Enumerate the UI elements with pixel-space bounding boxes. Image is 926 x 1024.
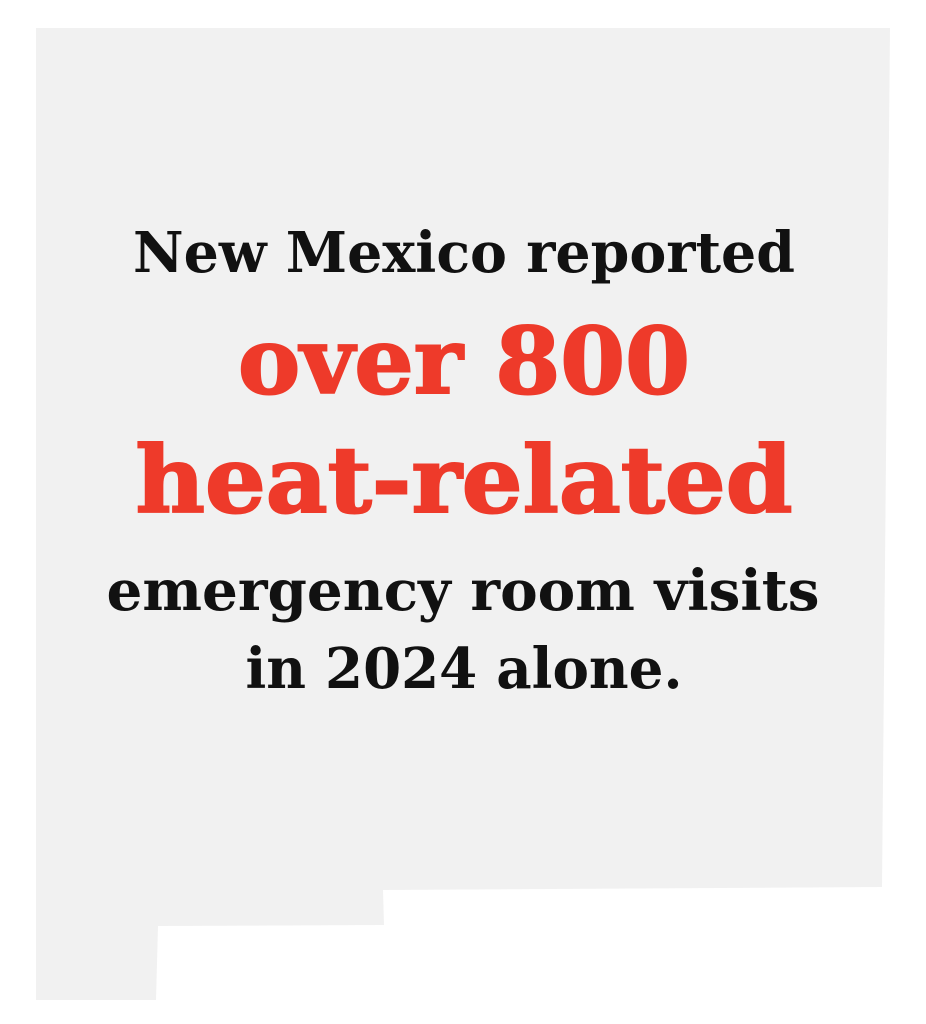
highlight: heat-related: heat-related xyxy=(136,426,792,534)
text line: emergency room visits: emergency room visits xyxy=(106,558,820,624)
text block: headline statistic xyxy=(106,220,820,702)
text line: in 2024 alone: in 2024 alone. xyxy=(246,636,682,702)
highlight: over 800: over 800 xyxy=(238,307,690,415)
heading line 1: New Mexico reported xyxy=(133,220,795,286)
